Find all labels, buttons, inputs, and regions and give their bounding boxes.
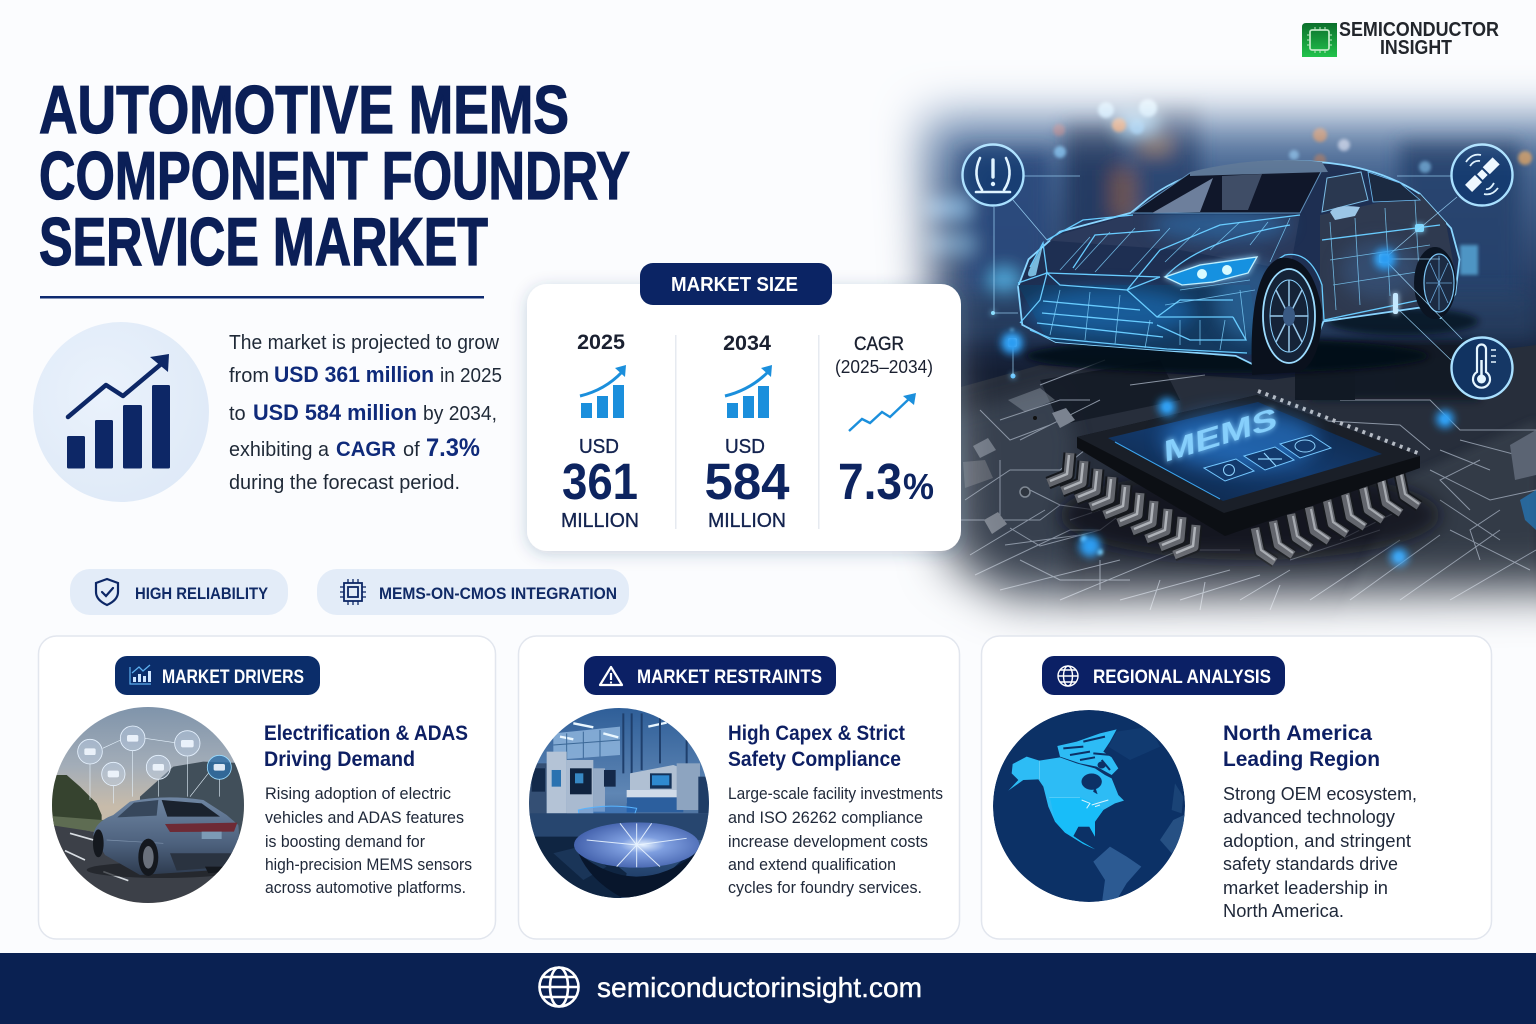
title: AUTOMOTIVE MEMS: [39, 72, 569, 148]
chip pins: [1048, 453, 1419, 562]
market summary paragraph: from: [229, 365, 269, 387]
column 2025: [561, 330, 639, 532]
body text: safety standards drive: [1223, 854, 1398, 874]
photo: cleanroom with silicon wafer: [527, 707, 713, 903]
body text: high-precision MEMS sensors: [265, 856, 472, 874]
column 2034: [704, 331, 790, 532]
equipment cabinets: [528, 752, 712, 817]
icon: thermometer: [1452, 338, 1512, 398]
icon: chip: [340, 579, 366, 605]
body text: increase development costs: [728, 833, 928, 851]
badge: market drivers: MARKET DRIVERS: [162, 666, 304, 688]
hero image: car above MEMS chip on a circuit board: [890, 82, 1536, 635]
logo wordmark: SEMICONDUCTOR: [1339, 19, 1499, 41]
heading: Driving Demand: [264, 748, 415, 771]
pill: high reliability: [70, 569, 288, 615]
icon: globe: [540, 968, 578, 1006]
city and board backdrop: [890, 82, 1536, 635]
panel: regional analysis: [982, 636, 1492, 939]
body text: North America.: [1223, 901, 1344, 921]
body shading: [1018, 190, 1460, 355]
icon: trend line: [849, 393, 916, 431]
icon: warning triangle: [600, 667, 622, 685]
website: semiconductorinsight.com: [597, 972, 922, 1003]
car body: [1018, 161, 1459, 366]
heading: Safety Compliance: [728, 748, 901, 771]
market summary paragraph: The market is projected to grow: [229, 332, 500, 354]
market summary paragraph: USD 584 million: [253, 400, 417, 425]
icon: bar chart: [130, 665, 151, 684]
market summary paragraph: USD 361 million: [274, 362, 434, 387]
market size card: [527, 263, 961, 551]
body text: across automotive platforms.: [265, 879, 466, 897]
pill: MEMS-on-CMOS integration: MEMS-ON-CMOS INTEGRATION: [379, 584, 617, 603]
column CAGR: [835, 333, 934, 510]
market summary paragraph: CAGR: [336, 438, 396, 461]
heading: Electrification & ADAS: [264, 722, 468, 745]
heading: Leading Region: [1223, 748, 1380, 771]
pill: MEMS-on-CMOS integration: [317, 569, 629, 615]
badge: market restraints: MARKET RESTRAINTS: [637, 666, 822, 688]
side mirror: [1330, 206, 1360, 220]
body text: Strong OEM ecosystem,: [1223, 784, 1417, 804]
headlight: [1165, 257, 1257, 285]
heading: [1223, 722, 1380, 771]
market summary paragraph: to: [229, 403, 246, 425]
badge: regional analysis: [1042, 656, 1285, 695]
column CAGR: (2025–2034): [835, 357, 933, 377]
icon: shield: [96, 579, 118, 605]
column 2025: MILLION: [561, 510, 639, 532]
icon: satellite: [1452, 144, 1512, 206]
title: COMPONENT FOUNDRY: [39, 138, 630, 214]
wireframe car: [991, 160, 1478, 378]
wireframe mesh: [1050, 200, 1430, 350]
body text: Rising adoption of electric: [265, 785, 451, 803]
logo wordmark: [1339, 19, 1499, 59]
market size badge: [640, 263, 832, 305]
body text: and ISO 26262 compliance: [728, 809, 923, 827]
market summary paragraph: 7.3%: [426, 434, 480, 462]
footer bar: [0, 953, 1536, 1024]
sensor bubbles: [78, 726, 231, 786]
windows: [1132, 160, 1420, 213]
body text: market leadership in: [1223, 878, 1388, 898]
photo: car on highway with sensor icons: [50, 705, 250, 908]
market summary paragraph: exhibiting a: [229, 439, 330, 461]
body text: vehicles and ADAS features: [265, 809, 464, 827]
badge: market restraints: [584, 656, 836, 695]
chip label: MEMS: [1163, 401, 1278, 469]
heading: North America: [1223, 722, 1372, 745]
body text: and extend qualification: [728, 856, 896, 874]
icon: tire pressure sensor: [962, 144, 1024, 206]
column 2025: 361: [562, 453, 638, 510]
heading: High Capex & Strict: [728, 722, 905, 745]
connector lines: [994, 176, 1462, 376]
column CAGR: %: [903, 466, 934, 507]
column 2034: 2034: [723, 331, 771, 355]
icon: rising bars: [725, 365, 772, 418]
column 2025: 2025: [577, 330, 625, 354]
market summary paragraph: by 2034,: [423, 403, 497, 425]
column 2025: USD: [579, 435, 619, 458]
wet street reflection: [950, 290, 1536, 340]
badge: market drivers: [115, 656, 320, 695]
pill: high reliability: HIGH RELIABILITY: [135, 584, 269, 603]
circuit board: [961, 345, 1536, 564]
badge: regional analysis: REGIONAL ANALYSIS: [1093, 666, 1271, 688]
column CAGR: 7.3: [838, 453, 902, 510]
globe map: North America highlighted: [993, 710, 1185, 905]
market size badge: MARKET SIZE: [671, 274, 798, 296]
title: SERVICE MARKET: [39, 204, 488, 280]
wafer: [578, 853, 697, 898]
rear wheel: [1414, 247, 1456, 319]
highlighted North America: [1008, 729, 1124, 849]
column CAGR: CAGR: [854, 333, 904, 355]
board glow points: [1009, 328, 1448, 560]
MEMS chip: [1048, 391, 1440, 562]
car: [87, 797, 240, 878]
icon: globe: [1058, 666, 1078, 686]
body text: is boosting demand for: [265, 833, 425, 851]
column 2034: MILLION: [708, 510, 786, 532]
channels and lakes: [1063, 737, 1112, 794]
growth chart icon: [33, 322, 209, 502]
body text: advanced technology: [1223, 807, 1395, 827]
body text: adoption, and stringent: [1223, 831, 1411, 851]
logo: [1302, 19, 1499, 59]
title: [39, 72, 630, 280]
market summary paragraph: of: [403, 439, 420, 461]
body text: cycles for foundry services.: [728, 879, 922, 897]
panel: market restraints: [518, 636, 960, 939]
small board components: [963, 372, 1536, 534]
body text: [1223, 784, 1417, 921]
heading: [264, 722, 468, 771]
market summary paragraph: during the forecast period.: [229, 472, 460, 494]
icon: rising bars: [580, 365, 626, 418]
grille and bumper lines: [1018, 215, 1440, 353]
body text: [728, 785, 943, 897]
heading: [728, 722, 905, 771]
sensor nodes on the car: [991, 224, 1424, 378]
surrounding continents: [1093, 727, 1184, 905]
logo wordmark: INSIGHT: [1380, 37, 1452, 59]
body text: [265, 785, 472, 897]
logo mark: green chip: [1302, 23, 1337, 57]
column 2034: USD: [725, 435, 765, 458]
market summary paragraph: in 2025: [440, 365, 502, 387]
front wheel: [1252, 258, 1322, 375]
body text: Large-scale facility investments: [728, 785, 943, 803]
market summary paragraph: [229, 332, 502, 494]
column 2034: 584: [704, 453, 790, 510]
panel: market drivers: [38, 636, 496, 939]
